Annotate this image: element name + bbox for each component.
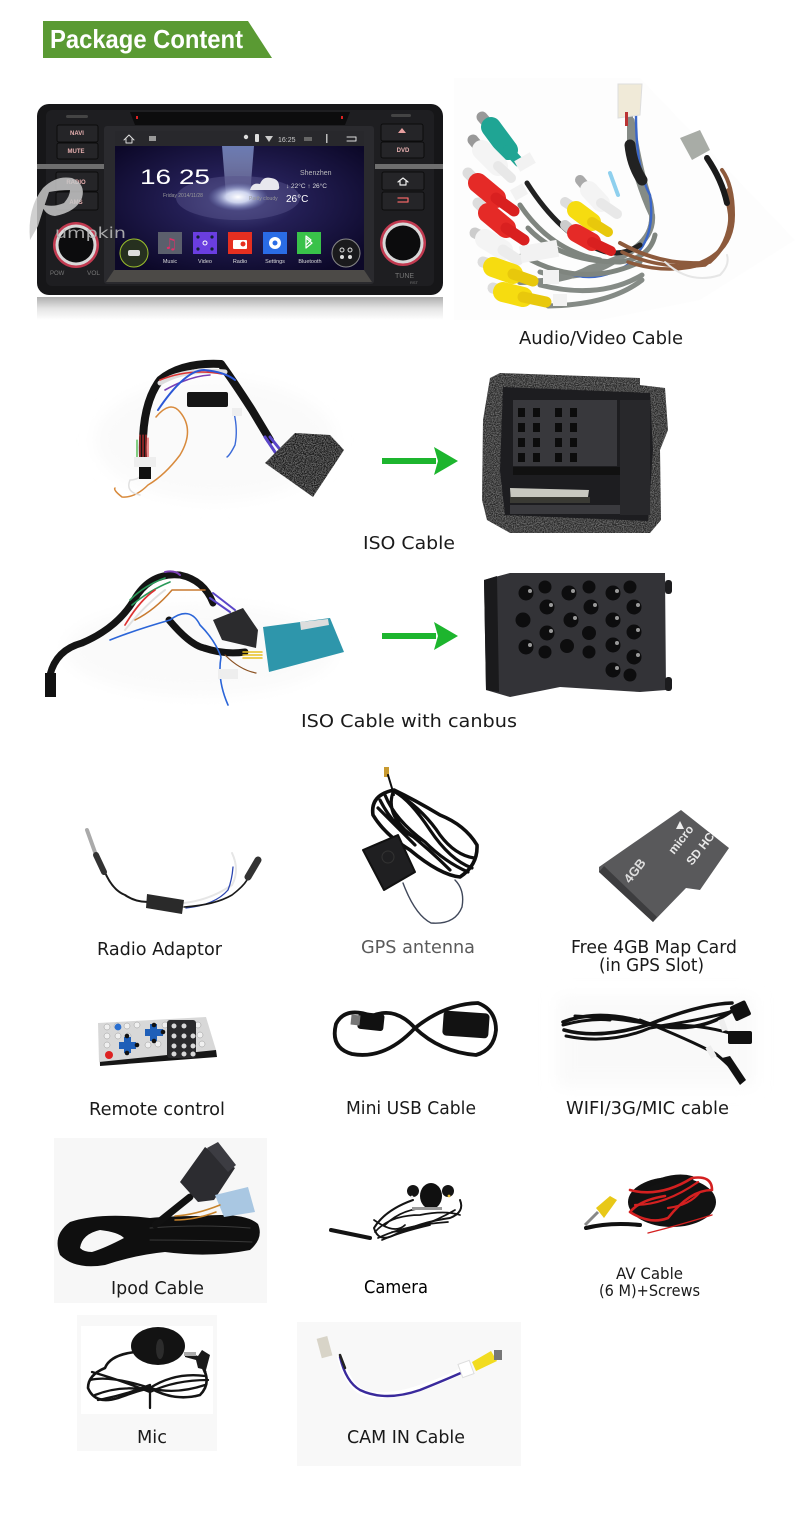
control knobs: TUNE [395,273,414,280]
label: free 4GB map card: (in GPS Slot) [599,955,704,976]
RCA plugs [468,117,617,302]
label: ISO cable: ISO Cable [363,533,455,554]
touch screen wallpaper: Shenzhen [300,170,332,177]
panel: CAM IN cable [297,1322,521,1466]
mini USB cable [335,1003,496,1055]
app icon row: Video [198,259,212,265]
label: CAM IN cable: CAM IN Cable [347,1427,465,1448]
micro SD card: 4GB [621,856,649,886]
touch screen wallpaper [115,131,364,270]
watermark logo [30,177,126,242]
side buttons: DVD [397,148,410,154]
control knobs: RST [410,280,419,285]
touch screen wallpaper: 26°C [286,194,308,205]
touch screen wallpaper: ↓ 22°C ↑ 26°C [286,182,327,190]
app icon row: Bluetooth [298,259,322,265]
side buttons: AMS [69,200,83,206]
ISO cable with canbus harness [45,571,344,705]
side buttons: MUTE [68,149,84,155]
app icon row: Radio [233,259,247,265]
touch screen wallpaper: Friday 2014/11/28 [163,193,203,199]
ISO cable harness [95,364,344,500]
label: free 4GB map card [571,937,737,976]
touch screen wallpaper: 16:25 [278,137,296,144]
arrow: canbus [382,622,458,650]
touch screen wallpaper: 16 25 [140,166,210,189]
label: mini USB cable: Mini USB Cable [346,1098,476,1119]
radio adaptor [87,830,258,914]
app icon row: Music [163,259,177,265]
heading banner: Package Content: Package Content [50,24,243,54]
label: camera: Camera [364,1277,428,1298]
label: ipod cable: Ipod Cable [111,1278,204,1299]
panel: mic [77,1315,217,1451]
label: AV cable and screws: (6 M)+Screws [599,1281,700,1300]
control knobs [50,220,426,285]
side buttons: RADIO [66,180,86,186]
label: GPS antenna: GPS antenna [361,937,475,958]
label: radio adaptor: Radio Adaptor [97,939,223,960]
side buttons [56,124,424,210]
micro SD card: SD HC [683,830,718,868]
WIFI 3G MIC cable [558,998,754,1086]
app icon row: ♫ [164,235,177,253]
rear view camera [331,1183,461,1240]
side buttons: NAVI [70,131,84,137]
head unit radio with screen [30,104,443,320]
label: ISO cable with canbus: ISO Cable with canbus [301,711,517,732]
label: remote control: Remote control [89,1099,225,1120]
arrow: ISO cable [382,447,458,475]
panel: ipod cable [54,1138,267,1303]
micro SD card: micro [665,822,696,857]
touch screen wallpaper: Partly cloudy [249,196,278,202]
app icon row: Settings [265,259,285,265]
control knobs: VOL [87,270,100,277]
audio video cable bundle [454,78,795,320]
label: mic: Mic [137,1427,167,1448]
label: AV cable and screws [599,1264,700,1300]
GPS antenna [363,767,477,923]
micro SD card [599,810,729,922]
canbus pin connector [484,573,672,697]
label: free 4GB map card: Free 4GB Map Card [571,937,737,958]
AV cable with screws [585,1176,716,1233]
watermark logo: umpkin [55,224,126,242]
remote control [98,1017,217,1066]
ISO connector foam wrapped [482,373,668,533]
app icon row [120,232,360,267]
label: audio video cable: Audio/Video Cable [519,328,683,349]
control knobs: POW [50,271,65,277]
label: AV cable and screws: AV Cable [616,1264,683,1283]
label: WIFI 3G MIC cable: WIFI/3G/MIC cable [566,1098,729,1119]
